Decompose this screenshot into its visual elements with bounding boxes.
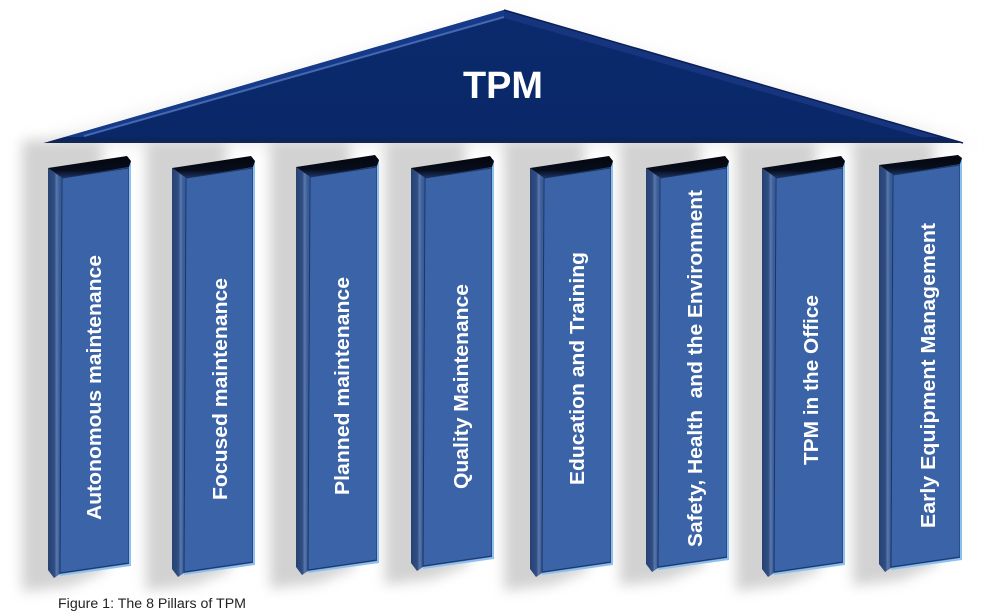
pillar 7 xyxy=(762,156,845,577)
pillar 4 xyxy=(411,156,494,571)
label: Safety, Health and the Environment xyxy=(684,190,707,547)
label: Early Equipment Management xyxy=(917,223,940,528)
pillar 3 xyxy=(296,155,379,575)
pillar 1 xyxy=(48,156,131,578)
pillar 8 xyxy=(879,155,962,572)
label: TPM in the Office xyxy=(800,295,823,465)
roof: TPM pediment xyxy=(44,10,963,143)
label: Quality Maintenance xyxy=(450,284,473,489)
label: Autonomous maintenance xyxy=(83,255,106,520)
pillar 2 xyxy=(172,156,255,577)
label: Planned maintenance xyxy=(331,277,354,495)
pillar 5 xyxy=(530,156,613,577)
pillar 6 xyxy=(646,156,729,572)
roof shadow xyxy=(30,16,975,145)
label: Education and Training xyxy=(566,252,589,485)
label: Focused maintenance xyxy=(209,278,232,500)
caption: Figure 1: The 8 Pillars of TPM xyxy=(58,596,246,611)
roof title: TPM xyxy=(463,65,543,107)
pillar shadows xyxy=(22,140,937,592)
